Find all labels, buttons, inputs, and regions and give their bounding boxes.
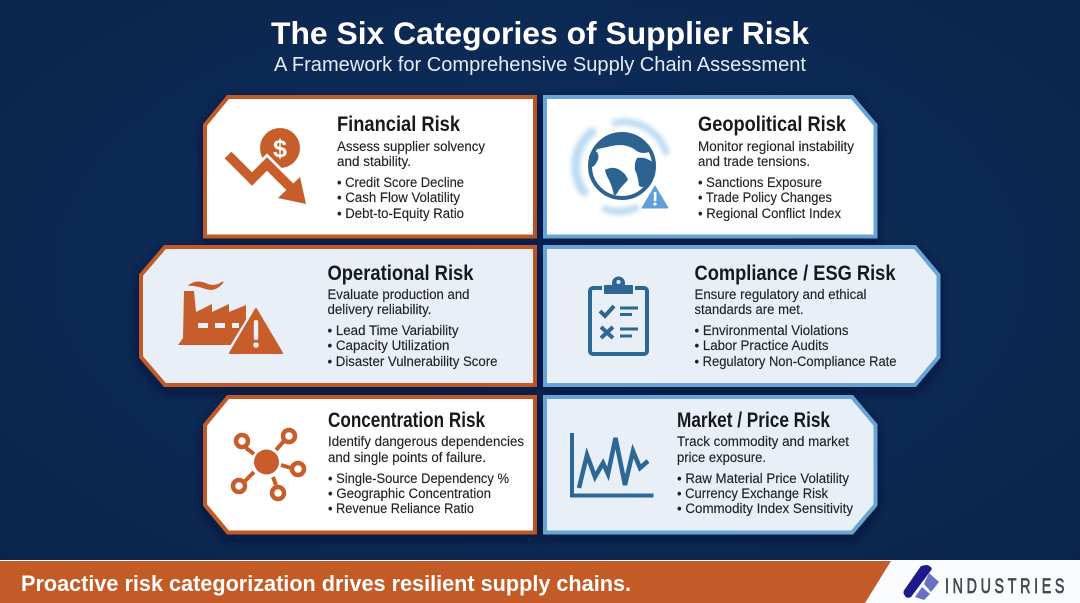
panel: financial risk xyxy=(205,97,535,236)
text: concentration risk: Identify dangerous dependencies xyxy=(328,434,524,450)
panel: compliance / esg risk xyxy=(545,247,938,385)
logo: industries xyxy=(904,565,1068,600)
text: concentration risk: Concentration Risk xyxy=(328,409,485,432)
text: financial risk: Financial Risk xyxy=(337,113,460,136)
text: geopolitical risk: Monitor regional instability xyxy=(698,139,855,155)
text: financial risk: and stability. xyxy=(337,154,411,170)
icon: globe with warning xyxy=(576,122,668,211)
panel: market / price risk xyxy=(545,397,876,532)
text: market / price risk: Track commodity and market xyxy=(677,434,849,450)
text: concentration risk xyxy=(328,409,524,517)
text: financial risk: • Cash Flow Volatility xyxy=(337,190,461,206)
text: concentration risk: and single points of failure. xyxy=(328,450,486,466)
footer message: Proactive risk categorization drives resilient supply chains. xyxy=(21,571,631,596)
text: geopolitical risk: • Regional Conflict Index xyxy=(698,206,841,222)
text: compliance / esg risk: • Environmental Violations xyxy=(694,323,848,339)
text: geopolitical risk: • Trade Policy Changes xyxy=(698,190,832,206)
text: concentration risk: • Single-Source Dependency % xyxy=(328,471,509,487)
text: compliance / esg risk: standards are met. xyxy=(694,302,804,318)
text: financial risk: Assess supplier solvency xyxy=(337,139,486,155)
text: financial risk xyxy=(337,113,486,222)
title: The Six Categories of Supplier Risk xyxy=(271,15,809,51)
text: market / price risk: • Commodity Index Sensitivity xyxy=(677,501,854,517)
text: operational risk: delivery reliability. xyxy=(328,302,432,318)
text: market / price risk: price exposure. xyxy=(677,450,766,466)
text: geopolitical risk: and trade tensions. xyxy=(698,154,810,170)
footer banner xyxy=(0,560,1080,603)
text: market / price risk xyxy=(677,409,854,517)
text: compliance / esg risk: Ensure regulatory and ethical xyxy=(694,287,866,303)
subtitle: A Framework for Comprehensive Supply Chain Assessment xyxy=(274,54,806,76)
text: market / price risk: • Currency Exchange Risk xyxy=(677,486,829,502)
text: geopolitical risk: • Sanctions Exposure xyxy=(698,175,822,191)
text: operational risk: • Lead Time Variability xyxy=(328,323,459,339)
text: operational risk xyxy=(328,262,498,370)
text: concentration risk: • Geographic Concentration xyxy=(328,486,491,502)
icon: hub network xyxy=(233,430,304,499)
icon: falling arrow with dollar coin xyxy=(228,128,306,204)
icon: falling arrow with dollar coin: $ xyxy=(273,135,287,163)
logo: industries: INDUSTRIES xyxy=(945,574,1068,598)
text: operational risk: • Disaster Vulnerability Score xyxy=(328,354,498,370)
text: concentration risk: • Revenue Reliance Ratio xyxy=(328,501,474,517)
text: compliance / esg risk: • Regulatory Non-Compliance Rate xyxy=(694,354,897,370)
icon: clipboard checklist xyxy=(590,276,647,354)
text: geopolitical risk xyxy=(698,113,855,222)
panel: concentration risk xyxy=(205,397,535,532)
text: operational risk: • Capacity Utilization xyxy=(328,338,450,354)
text: operational risk: Evaluate production and xyxy=(328,287,470,303)
text: financial risk: • Credit Score Decline xyxy=(337,175,464,191)
text: compliance / esg risk xyxy=(694,262,897,370)
panel: geopolitical risk xyxy=(545,97,876,236)
text: financial risk: • Debt-to-Equity Ratio xyxy=(337,206,464,222)
text: market / price risk: Market / Price Risk xyxy=(677,409,830,432)
text: market / price risk: • Raw Material Price Volatility xyxy=(677,471,850,487)
text: compliance / esg risk: • Labor Practice Audits xyxy=(694,338,828,354)
icon: volatile line chart xyxy=(572,433,654,496)
panel: operational risk xyxy=(141,247,535,385)
text: compliance / esg risk: Compliance / ESG Risk xyxy=(694,262,896,285)
text: geopolitical risk: Geopolitical Risk xyxy=(698,113,846,136)
text: operational risk: Operational Risk xyxy=(328,262,474,285)
icon: factory with warning xyxy=(178,282,287,356)
